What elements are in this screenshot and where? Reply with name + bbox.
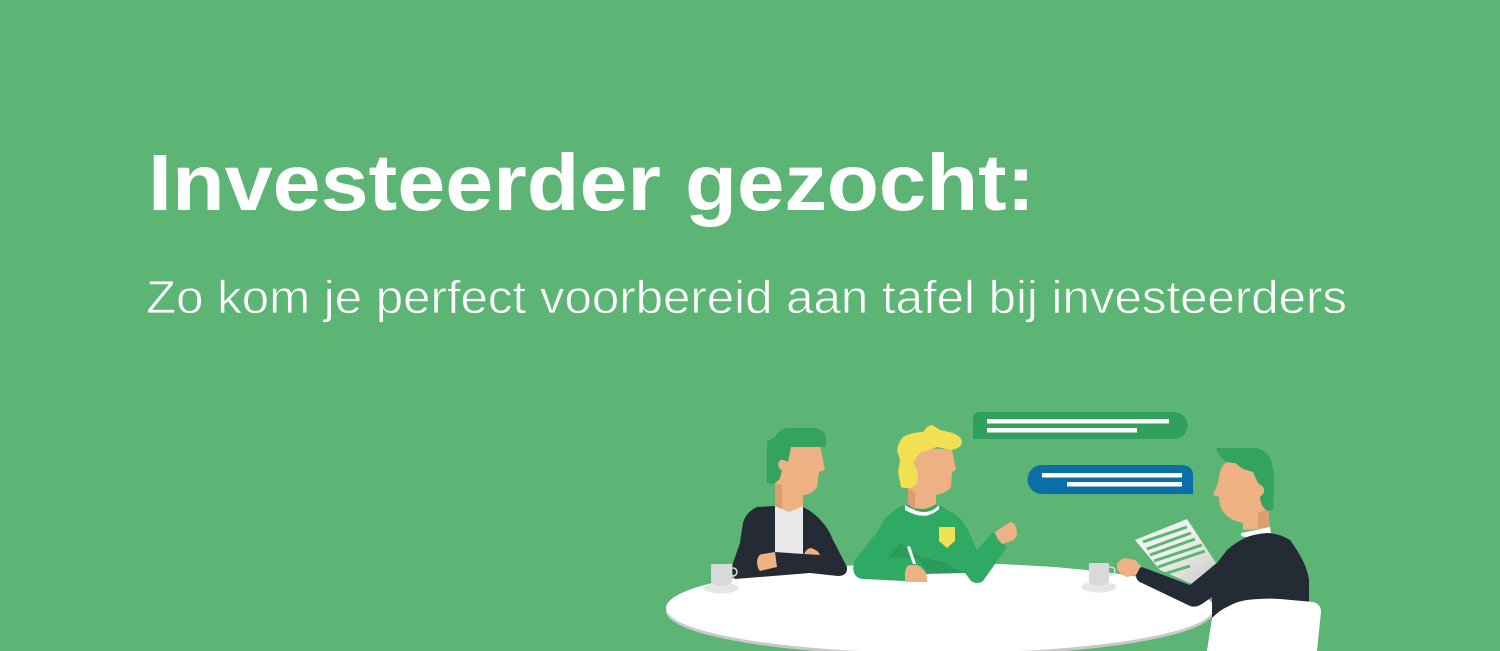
coffee cup: left (704, 564, 738, 594)
chair (1207, 599, 1321, 651)
speech bubble: green (973, 412, 1188, 439)
title: gezocht: (685, 138, 1035, 227)
speech bubble: blue (1028, 465, 1193, 494)
paper document (1135, 519, 1216, 584)
subtitle: Zo kom je perfect voorbereid aan tafel bij investeerders (146, 271, 1347, 323)
title: Investeerder (148, 138, 661, 227)
table (666, 563, 1214, 651)
person: middle man (853, 425, 1017, 583)
coffee cup: right (1082, 563, 1116, 592)
person: right man (1117, 448, 1309, 640)
person: left man (732, 428, 847, 579)
title (148, 138, 1035, 227)
